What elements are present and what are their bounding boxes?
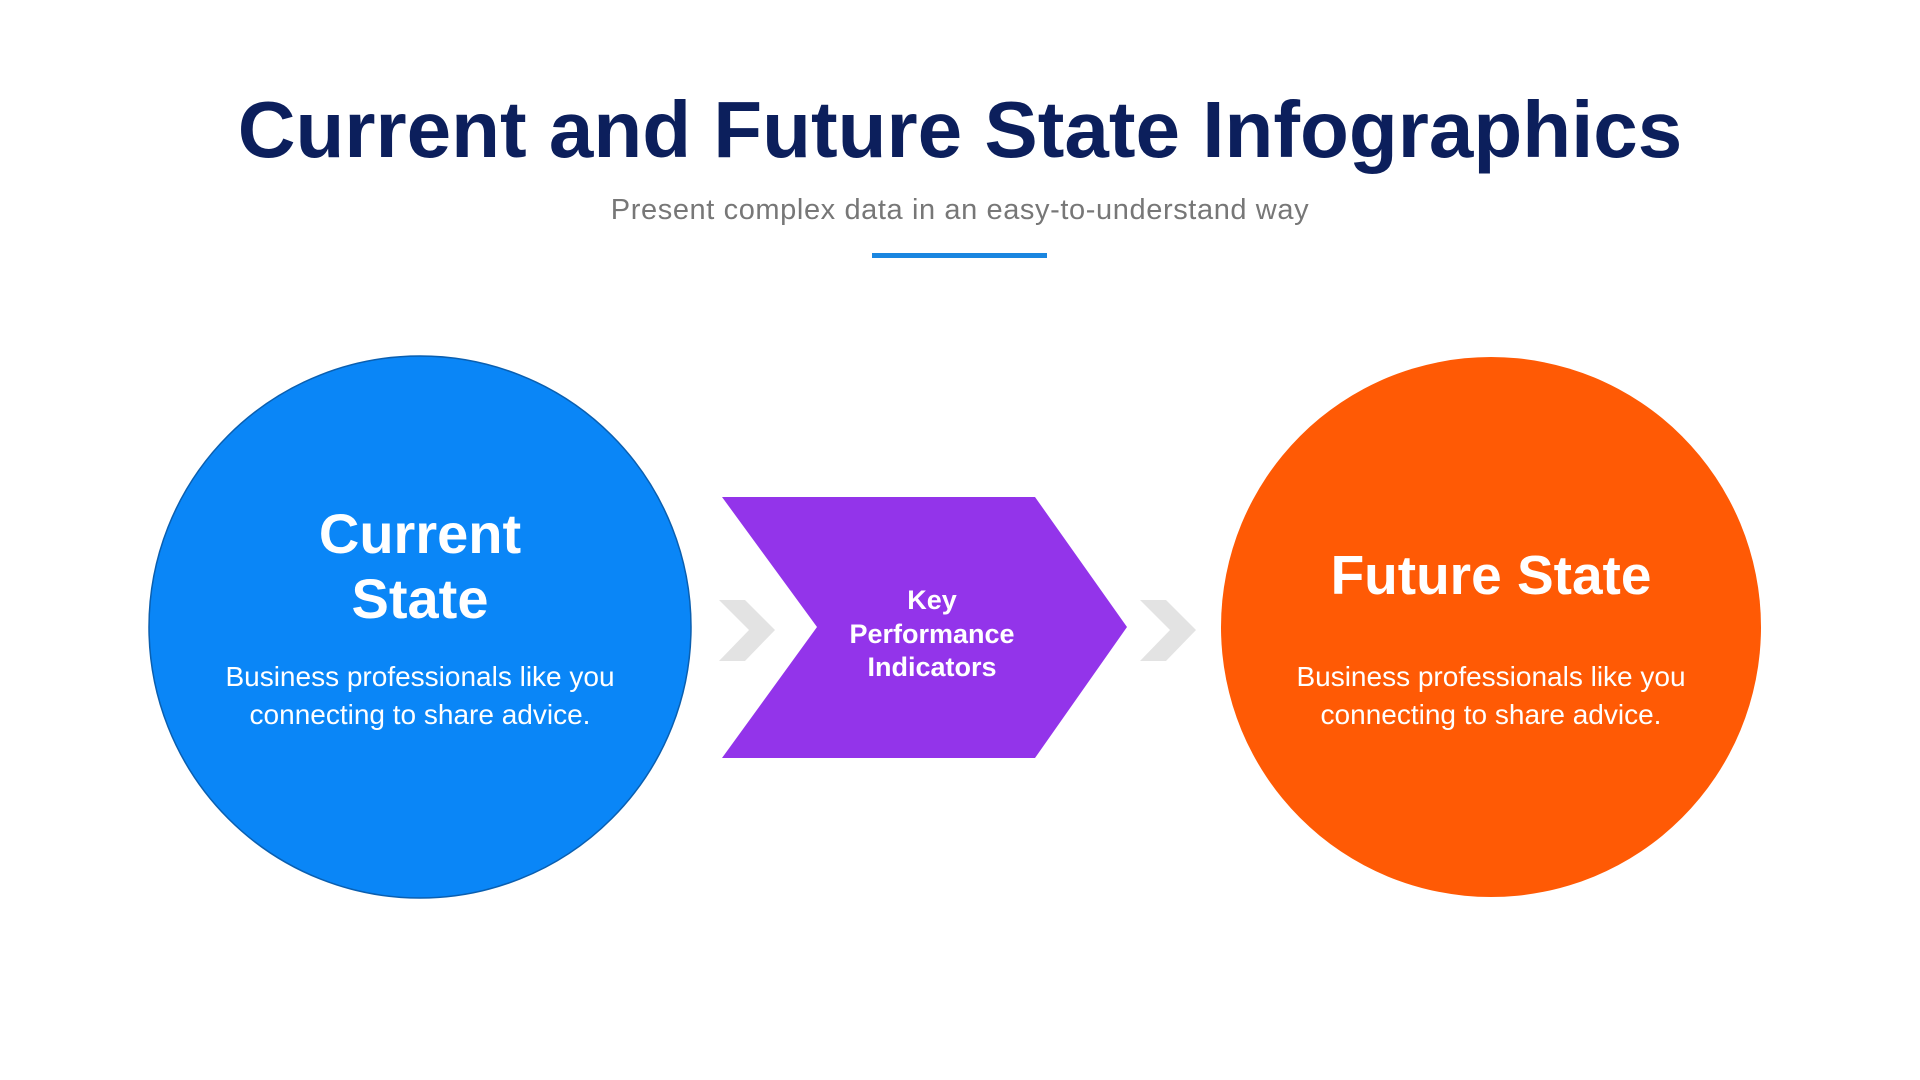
circle: future state: connecting to share advice. [1321,699,1661,730]
arrow: right gray chevron [1140,600,1196,661]
chevron: key performance indicators: Key [907,585,957,615]
subtitle: Present complex data in an easy-to-understand way [611,194,1309,226]
chevron: key performance indicators: Indicators [867,652,997,682]
circle: current state: State [352,567,488,630]
arrow: left gray chevron [719,600,775,661]
circle: future state [1221,357,1761,897]
circle: current state [149,356,691,898]
chevron: key performance indicators: Performance [849,619,1015,649]
chevron: key performance indicators [722,497,1127,758]
underline accent [872,253,1047,258]
circle: current state: Business professionals like you [225,661,615,692]
circle: future state: Business professionals like you [1296,661,1686,692]
circle: future state: Future State [1331,544,1651,606]
circle: current state: Current [319,502,521,565]
title: Current and Future State Infographics [238,85,1682,174]
circle: current state: connecting to share advice. [250,699,590,730]
